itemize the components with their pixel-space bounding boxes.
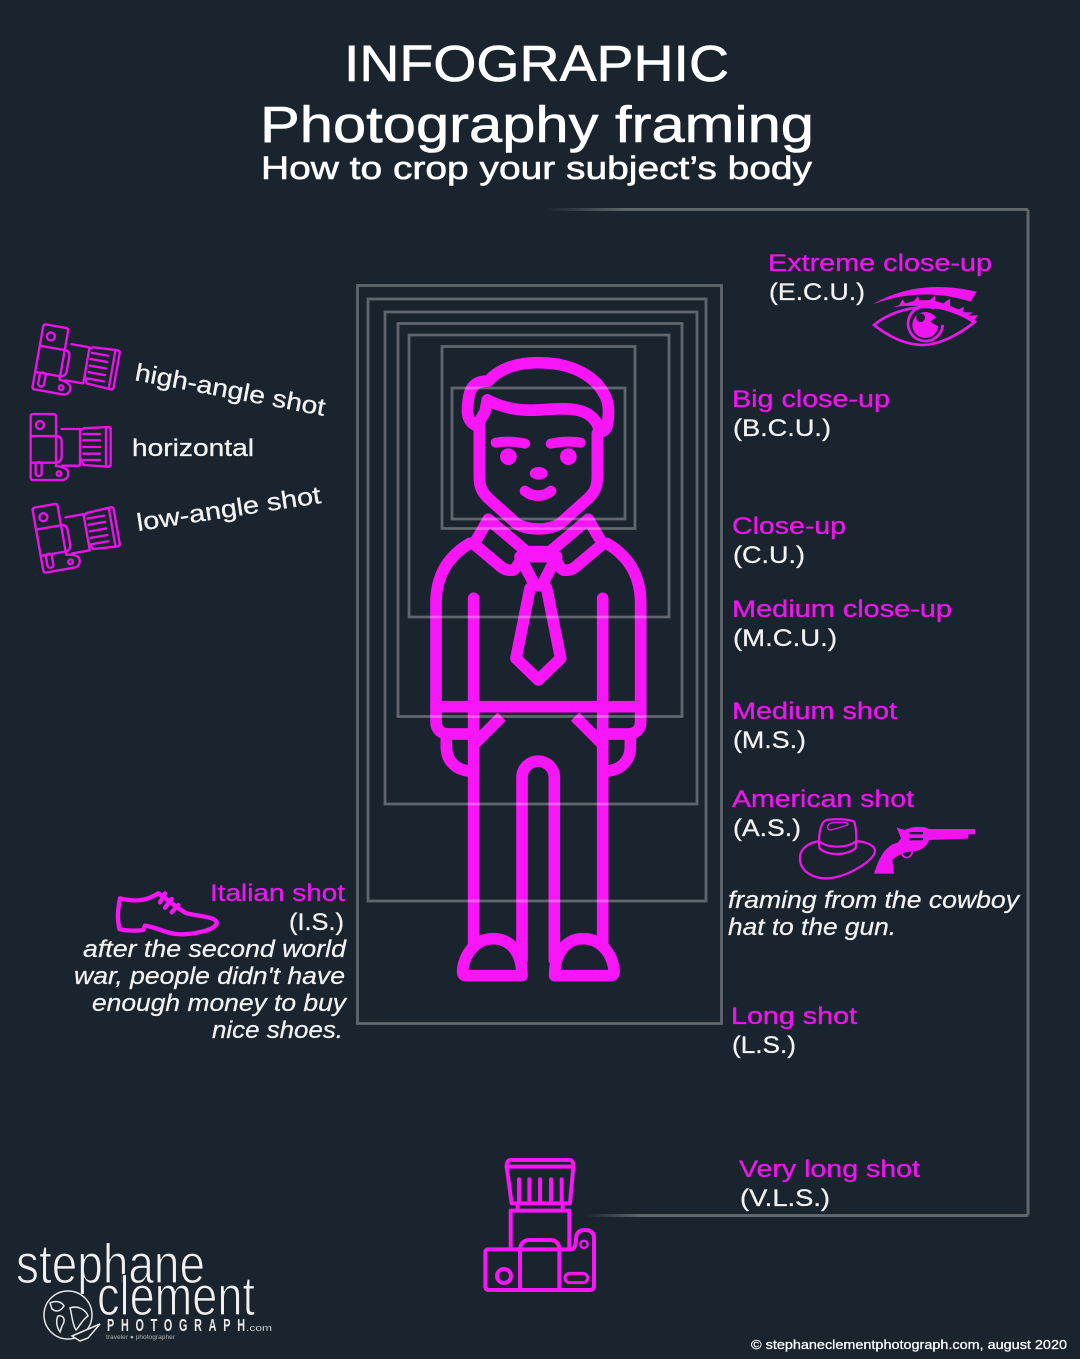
hair — [467, 363, 609, 432]
camera label: high-angle shot: high-angle shot — [133, 359, 328, 422]
icon: cowboy hat — [800, 819, 875, 878]
icon: shoe — [118, 893, 217, 934]
logo — [16, 1232, 272, 1341]
camera label: low-angle shot: low-angle shot — [135, 482, 323, 537]
label: very long shot: Very long shot — [739, 1156, 920, 1183]
title: Photography framing — [260, 96, 814, 153]
icon: camera top view — [485, 1160, 594, 1290]
label: long shot: Long shot — [731, 1003, 857, 1030]
icon: camera low-angle — [32, 494, 123, 573]
label: long shot — [731, 1003, 857, 1059]
label: very long shot: (V.L.S.) — [740, 1185, 830, 1212]
label: very long shot — [739, 1156, 920, 1212]
title: How to crop your subject’s body — [261, 150, 813, 186]
torso and arms — [436, 543, 641, 943]
label: american shot — [732, 786, 914, 842]
italian shot note: nice shoes. — [212, 1017, 343, 1044]
label: close-up: (C.U.) — [733, 542, 805, 569]
label: long shot: (L.S.) — [732, 1032, 796, 1059]
label: italian shot: Italian shot — [210, 880, 345, 907]
label: italian shot — [210, 880, 345, 936]
right foot — [555, 939, 614, 976]
american shot note: framing from the cowboy — [728, 887, 1021, 914]
label: extreme close-up — [768, 250, 992, 306]
american shot note — [728, 887, 1021, 941]
legs — [522, 761, 554, 960]
label: extreme close-up: (E.C.U.) — [769, 279, 865, 306]
logo: .com — [246, 1323, 272, 1333]
collar and tie — [474, 519, 603, 680]
very long shot frame — [545, 210, 1028, 1216]
american shot note: hat to the gun. — [728, 914, 896, 941]
logo: traveler ● photographer — [106, 1334, 176, 1341]
icon: eye — [873, 287, 978, 345]
person figure — [436, 363, 641, 976]
label: extreme close-up: Extreme close-up — [768, 250, 992, 277]
label: american shot: (A.S.) — [733, 815, 801, 842]
logo: stephane — [16, 1232, 205, 1295]
label: big close-up: (B.C.U.) — [733, 415, 831, 442]
icon: revolver — [874, 827, 975, 874]
label: close-up: Close-up — [732, 513, 846, 540]
title — [260, 35, 814, 186]
label: italian shot: (I.S.) — [289, 909, 344, 936]
label: medium close-up: Medium close-up — [732, 596, 952, 623]
label: close-up — [732, 513, 846, 569]
nested framing rectangles — [358, 286, 722, 1024]
left foot — [463, 939, 522, 976]
label: medium shot: Medium shot — [732, 698, 897, 725]
italian shot note: after the second world — [83, 936, 347, 963]
logo: PHOTOGRAPH — [107, 1317, 245, 1336]
italian shot note: war, people didn't have — [74, 963, 345, 990]
italian shot note — [74, 936, 348, 1044]
italian shot note: enough money to buy — [92, 990, 348, 1017]
logo globe — [44, 1291, 100, 1341]
label: big close-up — [732, 386, 890, 442]
camera label: horizontal: horizontal — [132, 435, 254, 462]
copyright footer: © stephaneclementphotograph.com, august 2020 — [751, 1337, 1067, 1352]
label: big close-up: Big close-up — [732, 386, 890, 413]
icon: camera horizontal — [31, 414, 111, 480]
icon: camera high-angle — [32, 324, 122, 403]
title: INFOGRAPHIC — [344, 35, 729, 92]
label: medium shot: (M.S.) — [733, 727, 806, 754]
label: medium close-up — [732, 596, 952, 652]
face — [479, 423, 597, 529]
label: medium shot — [732, 698, 897, 754]
logo: clement — [97, 1264, 255, 1327]
label: american shot: American shot — [732, 786, 914, 813]
label: medium close-up: (M.C.U.) — [733, 625, 837, 652]
